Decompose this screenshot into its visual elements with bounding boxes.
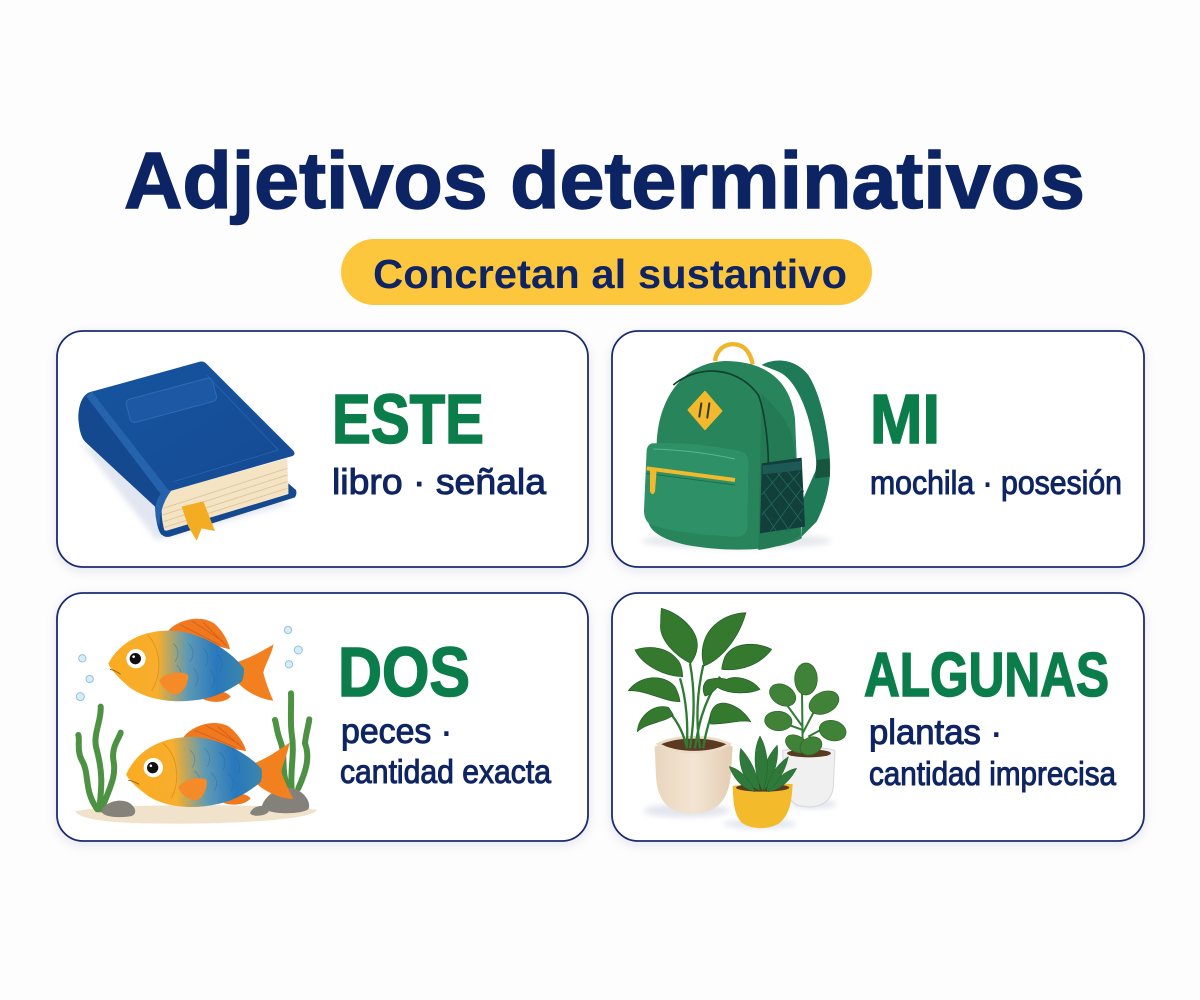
bubbles <box>76 626 302 701</box>
text: plantas · cantidad imprecisa <box>869 713 1117 792</box>
text: libro · señala: libro · señala <box>332 461 547 502</box>
text: peces · cantidad exacta: cantidad exacta <box>340 753 552 790</box>
text: peces · cantidad exacta: peces · <box>341 712 452 751</box>
text: plantas · cantidad imprecisa: cantidad imprecisa <box>869 755 1117 792</box>
panel: ALGUNAS <box>612 593 1144 841</box>
title: Adjetivos determinativos <box>124 136 1085 225</box>
small plant <box>764 663 848 759</box>
word: ALGUNAS: ALGUNAS <box>864 641 1109 710</box>
rocks <box>102 801 135 817</box>
large plant <box>628 608 772 748</box>
icon: backpack <box>642 344 832 550</box>
subtitle pill: Concretan al sustantivo <box>373 251 847 297</box>
word: ESTE: ESTE <box>332 380 484 458</box>
word: MI: MI <box>870 380 940 458</box>
seabed <box>75 805 317 824</box>
icon: book <box>78 362 296 541</box>
white pot <box>783 748 835 807</box>
seaweed <box>78 693 309 809</box>
text: plantas · cantidad imprecisa: plantas · <box>869 713 1002 752</box>
fish 2 <box>123 717 294 813</box>
panel: MI <box>612 331 1144 567</box>
cream pot <box>655 738 733 814</box>
text: peces · cantidad exacta <box>340 712 552 790</box>
text: mochila · posesión: mochila · posesión <box>870 464 1122 501</box>
subtitle pill <box>341 239 872 305</box>
word: DOS: DOS <box>338 633 470 711</box>
yellow pot <box>733 784 793 828</box>
icon: fish and seabed <box>75 619 317 824</box>
panel: ESTE <box>57 331 588 567</box>
icon: plants <box>628 608 848 829</box>
fish 1 <box>108 619 274 702</box>
succulent <box>729 736 797 792</box>
panel: DOS <box>57 593 588 841</box>
